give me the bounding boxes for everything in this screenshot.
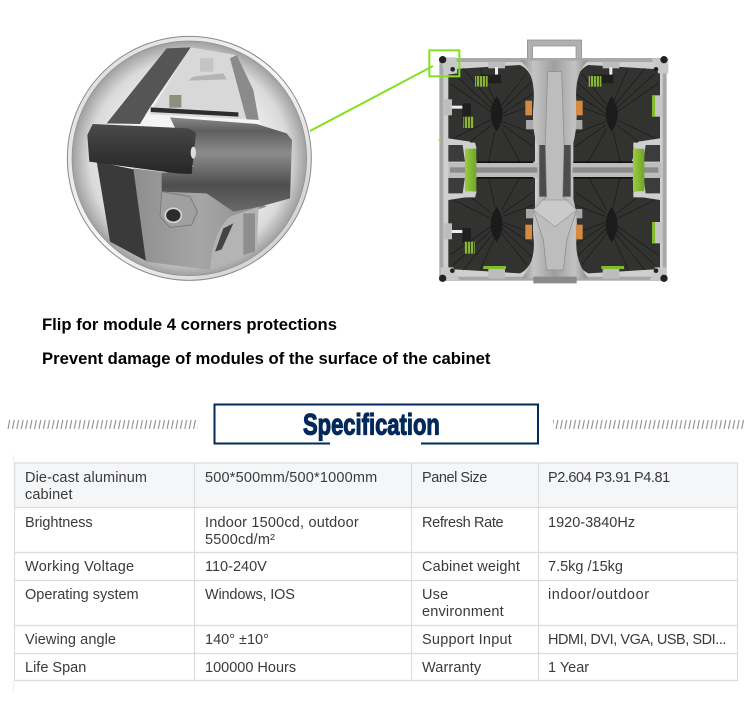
table row 1: cabinet [25,487,73,503]
table row 2: Refresh Rate [422,515,503,531]
left hatch decoration [7,420,198,429]
table row 6: Warranty [422,660,481,676]
magnified corner circle [67,36,311,280]
table row 5: HDMI, DVI, VGA, USB, SDI... [548,632,726,648]
table row 1: P2.604 P3.91 P4.81 [548,470,670,486]
table row 3: 7.5kg /15kg [548,559,623,575]
table row 2: 1920-3840Hz [548,515,635,531]
handle [527,40,582,58]
table row 5: Support Input [422,632,512,648]
table row 1: 500*500mm/500*1000mm [205,470,377,486]
table row 6: Life Span [25,660,86,676]
table row 3 [25,559,623,575]
table row 4: Use [422,587,448,603]
cross arms [448,161,662,179]
table row 4: environment [422,604,504,620]
table row 2: 5500cd/m² [205,532,275,548]
callout: green highlight box [429,50,459,76]
table row 6: 100000 Hours [205,660,296,676]
table row 5 [25,632,726,648]
table row 5: Viewing angle [25,632,116,648]
table row 2 [25,515,635,548]
table row 1: Die-cast aluminum [25,470,147,486]
table row 4: Operating system [25,587,139,603]
text: prevent damage line: Prevent damage of modules of the surface of the cabinet [42,349,490,368]
table row 1: Panel Size [422,470,487,486]
table row 4 [25,587,650,620]
table row 5: 140° ±10° [205,632,269,648]
table row 4: Windows, IOS [205,587,295,603]
specification table grid [14,455,738,692]
table row 3: Cabinet weight [422,559,520,575]
callout: green leader line [310,66,433,131]
LED cabinet rear view [429,40,668,283]
table row 2: Brightness [25,515,93,531]
corner protectors [439,56,668,282]
table row 3: 110-240V [205,559,267,575]
orange clips [525,101,583,239]
specification frame [214,404,538,444]
grey latches and green tabs [444,62,663,279]
table row 2: Indoor 1500cd, outdoor [205,515,359,531]
text: flip line: Flip for module 4 corners protections [42,315,337,334]
right hatch decoration [553,420,744,429]
table row 3: Working Voltage [25,559,134,575]
table row 6: 1 Year [548,660,589,676]
specification heading: Specification [303,409,440,442]
table row 4: indoor/outdoor [548,587,650,603]
table row 1 [25,470,670,503]
table row 6 [25,660,589,676]
green side latches [463,143,645,197]
center spine [520,61,588,283]
small green marker dot [439,139,441,141]
